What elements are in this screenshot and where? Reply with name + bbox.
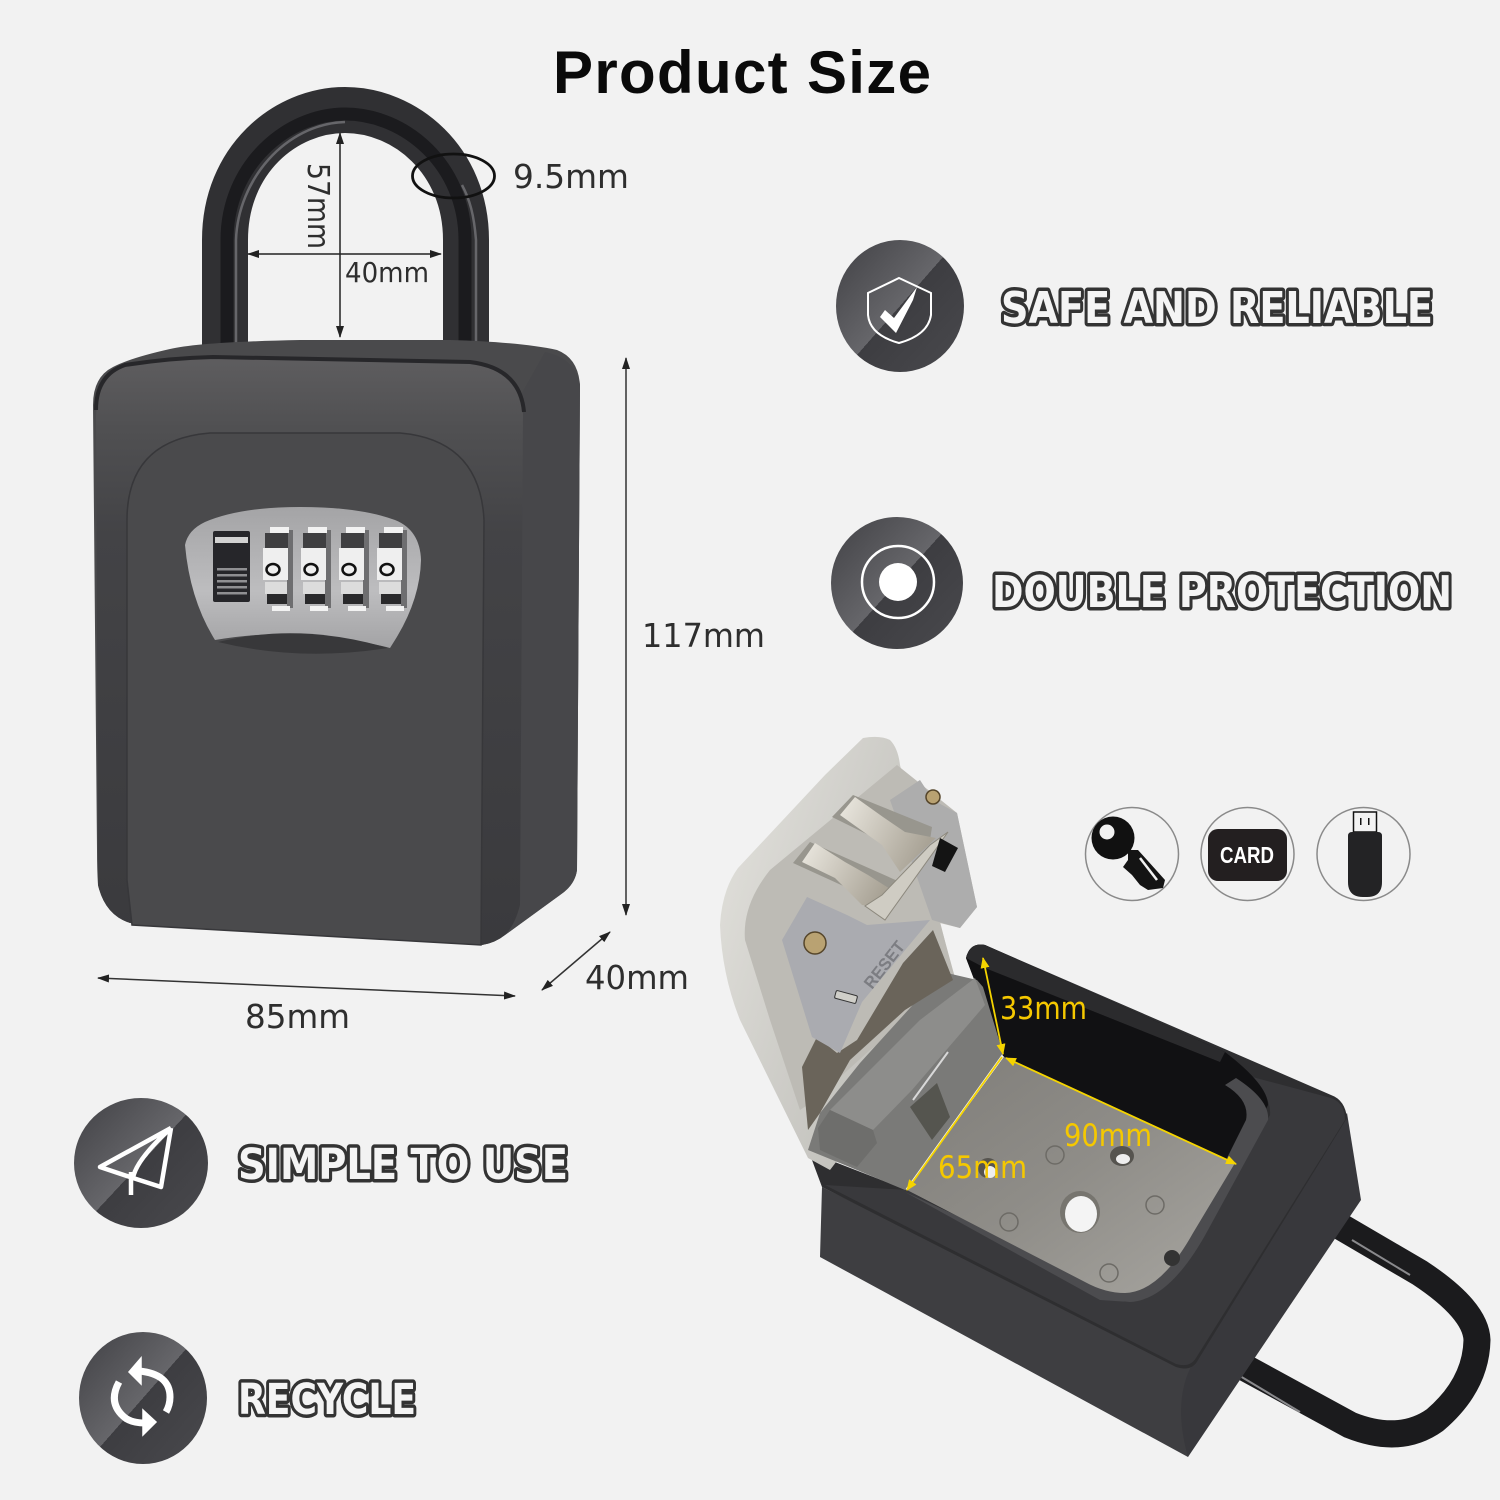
dimension: depth arrow (542, 932, 610, 990)
tab slot lower (793, 842, 900, 905)
lid plate (720, 737, 960, 1170)
latch bar lower (802, 843, 895, 908)
closed box front frame (96, 358, 523, 945)
closed box shackle (225, 110, 476, 356)
text: safe and reliable: SAFE AND RELIABLE (1001, 283, 1433, 334)
lid right bracket (890, 780, 977, 928)
inner opening rim (905, 1078, 1268, 1302)
closed box top edge line (96, 357, 524, 412)
dimension: height arrow (625, 358, 627, 915)
text: simple to use: SIMPLE TO USE (238, 1140, 568, 1190)
dial 3 (339, 527, 369, 611)
label: 57mm: 57mm (300, 163, 335, 249)
dial 1 (263, 527, 293, 611)
grey cover piece (782, 897, 930, 1053)
closed box side face (505, 352, 580, 935)
hinge pocket (910, 1083, 950, 1140)
cover engraved text: RESET (860, 937, 909, 992)
dial window (185, 507, 421, 654)
yellow dimension lines (907, 958, 1236, 1190)
dial 2 (301, 527, 331, 611)
icon: card: CARD (1220, 842, 1274, 868)
back wall top rim (966, 945, 1225, 1062)
latch clip (865, 832, 948, 920)
icon: double ring (831, 517, 963, 649)
open box front side face (820, 1187, 1197, 1457)
hinge foot (818, 1110, 877, 1167)
label: 65mm: 65mm (938, 1150, 1027, 1186)
closed box door panel (127, 433, 484, 945)
title: Product Size (553, 39, 931, 106)
floor hole left (978, 1158, 998, 1178)
floor hole large (1060, 1191, 1100, 1233)
hinge barrel (808, 973, 1003, 1190)
label: 90mm: 90mm (1064, 1118, 1152, 1154)
latch shadow window (932, 838, 958, 872)
latch bar upper (840, 797, 936, 872)
lid inner cavity (802, 930, 953, 1130)
floor hole large opening (1065, 1196, 1097, 1232)
feature: simple to use (74, 1098, 568, 1228)
hinge roll lighter (830, 978, 985, 1130)
label: 33mm: 33mm (1000, 991, 1087, 1027)
icon: paper plane (74, 1098, 208, 1228)
open box rim top face (809, 945, 1347, 1368)
closed box silhouette (93, 340, 580, 945)
icon: card (1201, 808, 1294, 900)
dial 4 (377, 527, 407, 611)
floor hole right edge (1164, 1250, 1180, 1266)
floor hole upper (1110, 1146, 1134, 1166)
text: recycle: RECYCLE (238, 1375, 416, 1425)
small pin (834, 990, 858, 1004)
feature: recycle (79, 1332, 416, 1464)
rim highlight band (825, 1075, 1345, 1365)
thumb button below dials (218, 633, 388, 654)
label: 9.5mm: 9.5mm (513, 157, 629, 196)
interior floor (907, 1057, 1235, 1293)
open box shackle (1240, 1225, 1477, 1434)
label: 40mm shackle: 40mm (345, 256, 429, 289)
closed lock box product photo (93, 110, 580, 945)
open box back wall (966, 945, 1268, 1168)
feature: safe and reliable (836, 240, 1433, 372)
label: 85mm: 85mm (245, 997, 350, 1036)
dimension: shackle height arrow (339, 133, 341, 337)
top screw (926, 790, 940, 804)
slider (213, 531, 250, 602)
dimension: shackle width arrow (248, 253, 441, 255)
open lock box product photo (720, 737, 1477, 1457)
feature: double protection (831, 517, 1452, 649)
icon: usb stick (1317, 808, 1410, 900)
thickness ellipse (412, 154, 494, 198)
dimension: width arrow (98, 978, 515, 996)
label: 40mm depth: 40mm (585, 958, 689, 997)
open box right face (1181, 1113, 1361, 1457)
icon: shield check (836, 240, 964, 372)
floor dimples (1000, 1146, 1164, 1282)
icon: recycle arrows (79, 1332, 207, 1464)
icon: key (1086, 808, 1178, 900)
tab slot upper (832, 795, 932, 857)
screw on cover (804, 932, 826, 954)
hinge spring wire (913, 1052, 948, 1100)
lid inner block (745, 765, 977, 1110)
label: 117mm: 117mm (642, 616, 765, 655)
